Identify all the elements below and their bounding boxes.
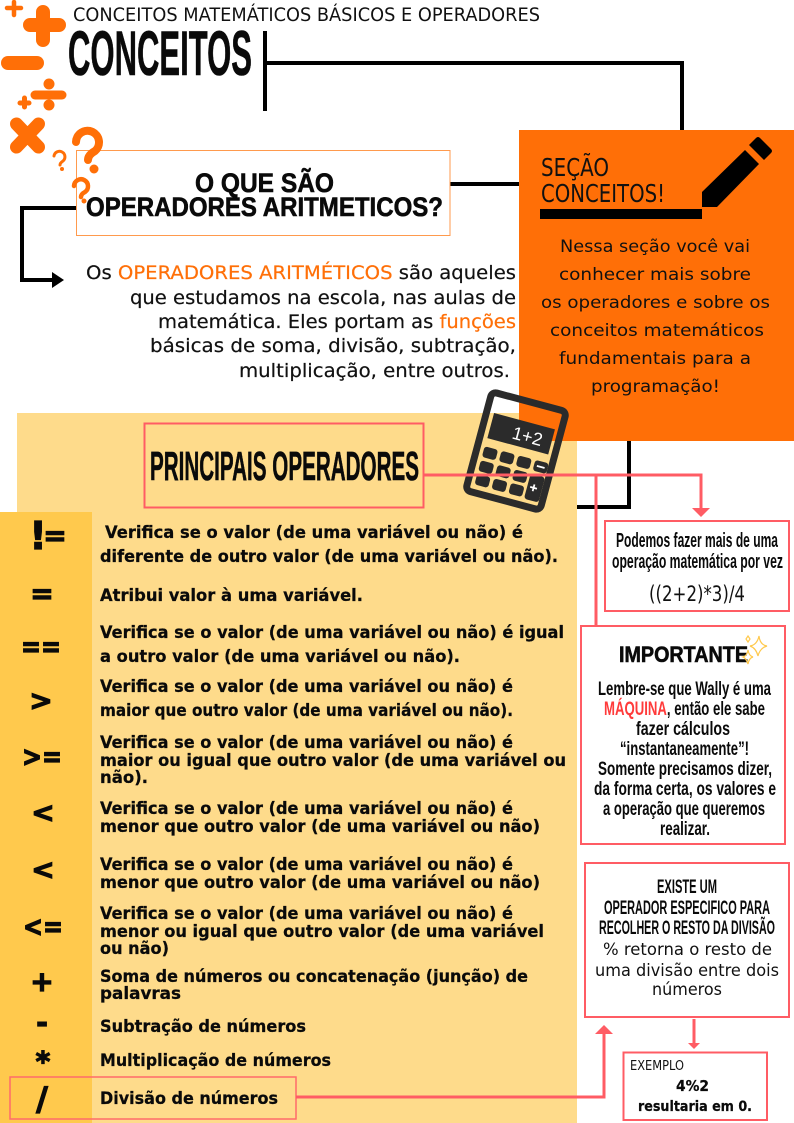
- row: !=: Verifica se o valor (de uma variável ou não) é: [105, 523, 523, 543]
- section description: Nessa seção você vai: [560, 237, 750, 256]
- text block: operadores aritméticos definition: Os OPERADORES ARITMÉTICOS são aqueles: [86, 261, 516, 284]
- icon: math symbols decoration: [7, 2, 99, 204]
- row: / highlighted: [10, 1077, 296, 1119]
- row: >: [29, 677, 513, 721]
- row: <=: ou não): [100, 939, 169, 959]
- row: < repeated: menor que outro valor (de uma variável ou não): [100, 873, 540, 893]
- text block: operadores aritméticos definition: básicas de soma, divisão, subtração,: [150, 335, 516, 357]
- row: >=: maior ou igual que outro valor (de uma variável ou: [100, 751, 566, 771]
- row: ==: a outro valor (de uma variável ou não).: [100, 647, 460, 667]
- icon: sparkles: [743, 636, 767, 664]
- callout: exemplo: 4%2: [676, 1077, 709, 1095]
- callout: importante: [581, 626, 785, 844]
- section description: conceitos matemáticos: [550, 321, 764, 340]
- row: <: menor que outro valor (de uma variável ou não): [100, 817, 540, 837]
- callout: mais de uma operação: ((2+2)*3)/4: [649, 582, 745, 606]
- section heading: SEÇÃO: [541, 152, 609, 182]
- row: -: [36, 1006, 306, 1039]
- row: >=: [22, 733, 566, 788]
- connector: section panel to operators panel: [577, 441, 629, 507]
- row: !=: !: [29, 514, 47, 558]
- row: +: palavras: [100, 984, 181, 1004]
- heading: importante: IMPORTANTE: [619, 642, 748, 667]
- text block: operadores aritméticos definition: [86, 261, 516, 382]
- row: >: >: [29, 684, 53, 717]
- row: +: Soma de números ou concatenação (junção) de: [100, 967, 528, 987]
- arrow head: to multiple operations box: [692, 508, 710, 517]
- section description: os operadores e sobre os: [541, 293, 770, 312]
- section heading: CONCEITOS!: [541, 179, 665, 208]
- heading box: o que são operadores aritméticos: [76, 150, 450, 236]
- importante body text: [594, 679, 776, 840]
- heading box: o que são operadores aritméticos: OPERADORES ARITMETICOS?: [86, 192, 443, 222]
- heading box: o que são operadores aritméticos: O QUE SÃO: [195, 167, 334, 198]
- row: ==: Verifica se o valor (de uma variável ou não) é igual: [100, 623, 564, 643]
- section description: conhecer mais sobre: [559, 265, 751, 284]
- section description: [541, 237, 770, 396]
- section description: programação!: [591, 377, 720, 396]
- importante body text: fazer cálculos: [636, 719, 730, 740]
- text: CONCEITOS: [68, 19, 252, 89]
- row: <=: menor ou igual que outro valor (de uma variável: [100, 922, 544, 942]
- row: <: [31, 796, 540, 837]
- resto description: uma divisão entre dois: [595, 961, 779, 980]
- row: <=: <=: [23, 910, 63, 943]
- callout: operador resto da divisão: [585, 863, 789, 1017]
- row: +: [30, 965, 528, 1004]
- row: =: Atribui valor à uma variável.: [100, 586, 363, 606]
- row: !=: =: [43, 519, 67, 552]
- connector: principais operadores to side notes: [424, 475, 701, 626]
- icon: calculator: 1+2: [510, 423, 545, 450]
- resto heading: [599, 877, 775, 939]
- row: >=: >=: [22, 740, 62, 773]
- row: >: maior que outro valor (de uma variável ou não).: [100, 701, 513, 721]
- row: ==: ==: [21, 630, 61, 663]
- heading box: principais operadores: PRINCIPAIS OPERADORES: [150, 443, 419, 489]
- row: >: Verifica se o valor (de uma variável ou não) é: [100, 677, 513, 697]
- callout: exemplo: [624, 1052, 767, 1120]
- row: ==: [21, 623, 564, 667]
- row: *: *: [36, 1045, 51, 1078]
- row: *: [36, 1045, 331, 1078]
- resto description: números: [652, 980, 722, 999]
- connector: title to section panel: [265, 31, 682, 130]
- callout: exemplo: EXEMPLO: [630, 1058, 684, 1074]
- panel: principais operadores background: [17, 413, 577, 1123]
- heading box: principais operadores: [144, 424, 424, 508]
- row: -: -: [36, 1006, 48, 1039]
- row: <: <: [31, 796, 55, 829]
- text block: operadores aritméticos definition: multiplicação, entre outros.: [239, 360, 510, 382]
- panel: seção conceitos: [519, 130, 794, 441]
- panel: operator symbols column: [0, 512, 92, 1123]
- text block: operadores aritméticos definition: matemática. Eles portam as funções: [158, 311, 516, 333]
- arrow: heading to paragraph: [22, 208, 76, 288]
- connector: heading to section panel: [450, 182, 520, 186]
- row: <: Verifica se o valor (de uma variável ou não) é: [100, 799, 513, 819]
- row: <=: Verifica se o valor (de uma variável ou não) é: [100, 904, 513, 924]
- row: < repeated: <: [31, 853, 55, 886]
- arrow: resto box to exemplo: [688, 1019, 700, 1049]
- resto description: [595, 940, 779, 999]
- section description: fundamentais para a: [559, 349, 751, 368]
- row: <=: [23, 904, 544, 959]
- subtitle: CONCEITOS MATEMÁTICOS BÁSICOS E OPERADORES: [73, 3, 540, 26]
- arrow: divisão to resto box: [296, 1025, 613, 1097]
- icon: pencil: [540, 137, 772, 219]
- row: / highlighted: /: [36, 1080, 48, 1118]
- importante body text: realizar.: [660, 819, 710, 840]
- row: +: +: [30, 965, 54, 998]
- resto heading: EXISTE UM: [657, 877, 717, 898]
- callout: mais de uma operação: [605, 521, 789, 611]
- icon: calculator: [466, 392, 566, 510]
- row: !=: diferente de outro valor (de uma variável ou não).: [100, 547, 558, 567]
- row: *: Multiplicação de números: [100, 1051, 331, 1071]
- row: < repeated: Verifica se o valor (de uma variável ou não) é: [100, 855, 513, 875]
- callout: exemplo: resultaria em 0.: [638, 1099, 752, 1115]
- row: =: [30, 577, 363, 610]
- row: !=: [29, 514, 558, 567]
- row: -: Subtração de números: [100, 1017, 306, 1037]
- operators table: [10, 514, 566, 1119]
- section heading: [541, 152, 665, 208]
- row: =: =: [30, 577, 54, 610]
- row: < repeated: [31, 853, 540, 893]
- text block: operadores aritméticos definition: que estudamos na escola, nas aulas de: [130, 287, 516, 309]
- row: / highlighted: Divisão de números: [100, 1089, 278, 1109]
- row: >=: não).: [100, 768, 148, 788]
- resto description: % retorna o resto de: [603, 940, 772, 959]
- row: >=: Verifica se o valor (de uma variável ou não) é: [100, 733, 513, 753]
